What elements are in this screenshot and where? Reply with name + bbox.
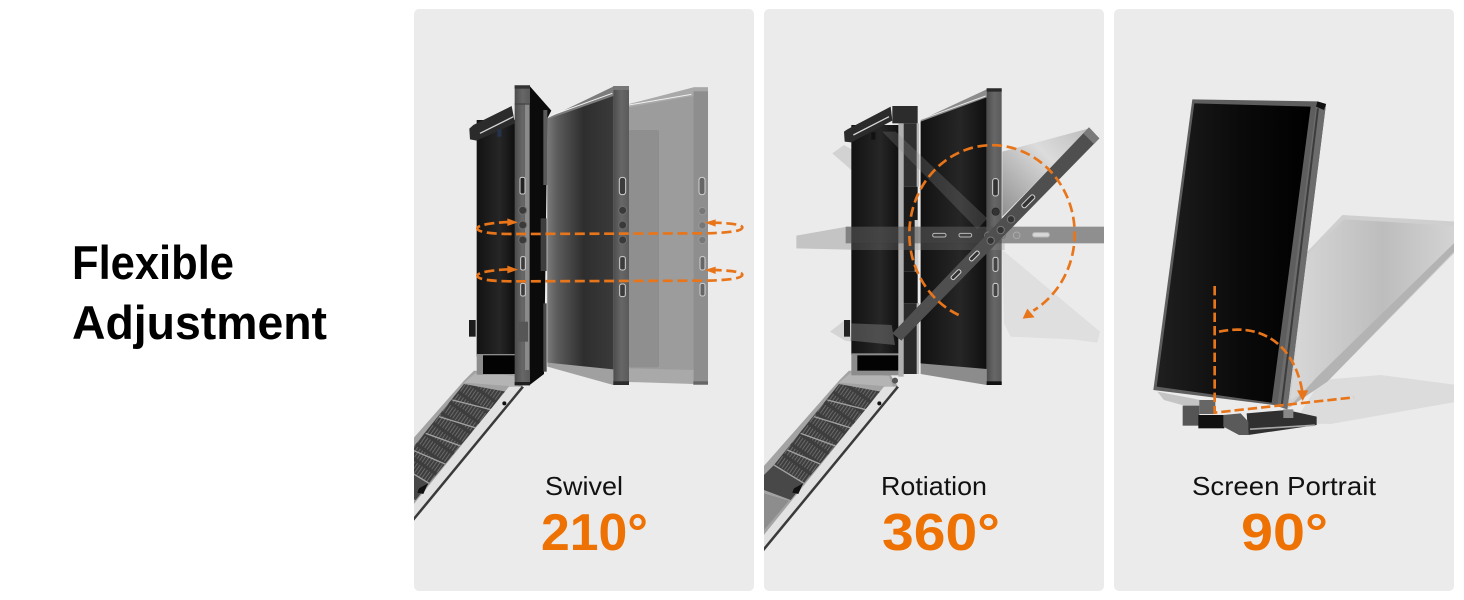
front monitor <box>1153 99 1326 409</box>
heading: Flexible Adjustment: Flexible <box>72 236 234 289</box>
ghost tilted monitor <box>1287 215 1457 408</box>
value: 90 degrees: 90° <box>1241 504 1328 562</box>
ghost lower screen over rear monitor <box>851 323 895 345</box>
heading: Flexible Adjustment: Adjustment <box>72 296 327 349</box>
illustration: tilting portrait monitor <box>1153 99 1457 435</box>
laptop deck <box>764 370 899 551</box>
ghost positions <box>796 128 1100 343</box>
ground shadow <box>1294 375 1457 424</box>
ghost diagonal over monitors <box>882 132 987 229</box>
heading: Flexible Adjustment <box>72 236 327 349</box>
illustration: rotating monitor on laptop <box>746 88 1106 569</box>
label: Rotiation: Rotiation <box>881 471 987 501</box>
laptop deck <box>414 370 524 521</box>
monitor position 2 <box>547 86 629 385</box>
monitor position 1 <box>515 85 551 385</box>
diagonal bezel <box>892 127 1099 341</box>
value: 360 degrees: 360° <box>882 504 1000 562</box>
illustration: swiveling monitor on laptop <box>414 85 744 521</box>
rear monitor <box>844 106 919 377</box>
arrow: lower swivel <box>477 266 742 281</box>
arrow: upper swivel <box>477 218 742 234</box>
value: 210 degrees: 210° <box>541 504 648 562</box>
horizontal ghost bar <box>846 227 1106 250</box>
panel: swivel <box>414 9 754 591</box>
front monitor <box>921 88 1002 385</box>
arrow: 90 degree angle <box>1215 286 1354 413</box>
stand base <box>1157 392 1317 435</box>
monitor position 3 ghost <box>629 87 708 385</box>
panel: screen portrait <box>1114 9 1457 591</box>
label: Screen Portrait: Screen Portrait <box>1192 471 1377 501</box>
rear monitor <box>469 106 515 375</box>
ports and buttons <box>520 177 705 297</box>
arrow: rotation arc <box>909 145 1075 319</box>
label: Swivel: Swivel <box>545 471 623 501</box>
panel: rotation <box>746 9 1106 591</box>
